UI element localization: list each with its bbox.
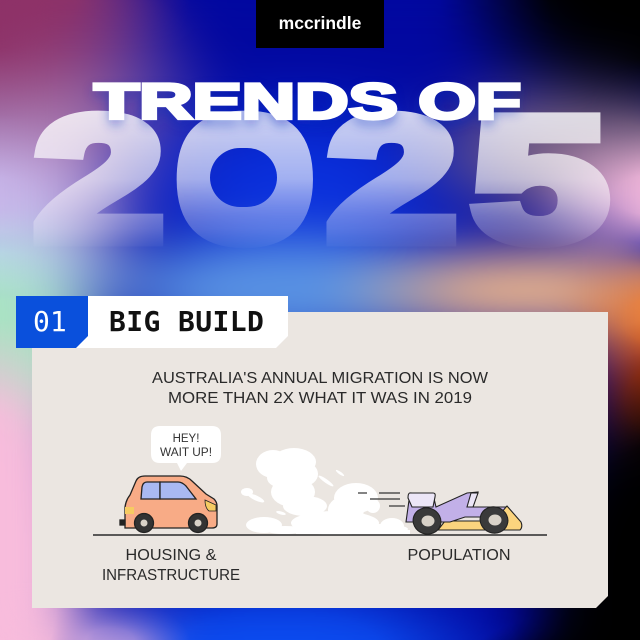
heading text bbox=[152, 370, 489, 407]
year 2025: 2 bbox=[34, 82, 164, 278]
tab: section number bbox=[16, 296, 88, 348]
speed lines bbox=[358, 493, 405, 506]
icon: racing car bbox=[406, 492, 522, 538]
label: population: POPULATION bbox=[408, 547, 510, 564]
year 2025: 2 bbox=[327, 82, 457, 278]
label: housing and infrastructure bbox=[102, 547, 240, 584]
smoke cloud bbox=[241, 448, 410, 535]
label: housing and infrastructure: HOUSING & bbox=[126, 547, 217, 564]
logo block: mccrindle bbox=[279, 13, 361, 33]
speech bubble bbox=[151, 426, 221, 471]
headline graphic bbox=[34, 74, 610, 246]
speech bubble: WAIT UP! bbox=[160, 447, 212, 459]
icon: orange car bbox=[120, 476, 217, 532]
label: housing and infrastructure: INFRASTRUCTURE bbox=[102, 567, 240, 584]
year 2025: 0 bbox=[176, 82, 314, 278]
tab: section title: BIG BUILD bbox=[109, 305, 264, 338]
tab: section title bbox=[76, 296, 288, 348]
speech bubble: HEY! bbox=[173, 433, 199, 445]
logo block bbox=[256, 0, 384, 48]
title shadow: TRENDS OF bbox=[93, 79, 522, 135]
panel: content card bbox=[32, 312, 608, 608]
tab: section number: 01 bbox=[33, 305, 67, 338]
heading text: AUSTRALIA'S ANNUAL MIGRATION IS NOW bbox=[152, 370, 489, 387]
title: TRENDS OF bbox=[94, 74, 521, 130]
heading text: MORE THAN 2X WHAT IT WAS IN 2019 bbox=[168, 390, 472, 407]
year 2025: 5 bbox=[472, 82, 608, 278]
road line bbox=[93, 534, 547, 536]
year 2025 bbox=[34, 110, 610, 246]
